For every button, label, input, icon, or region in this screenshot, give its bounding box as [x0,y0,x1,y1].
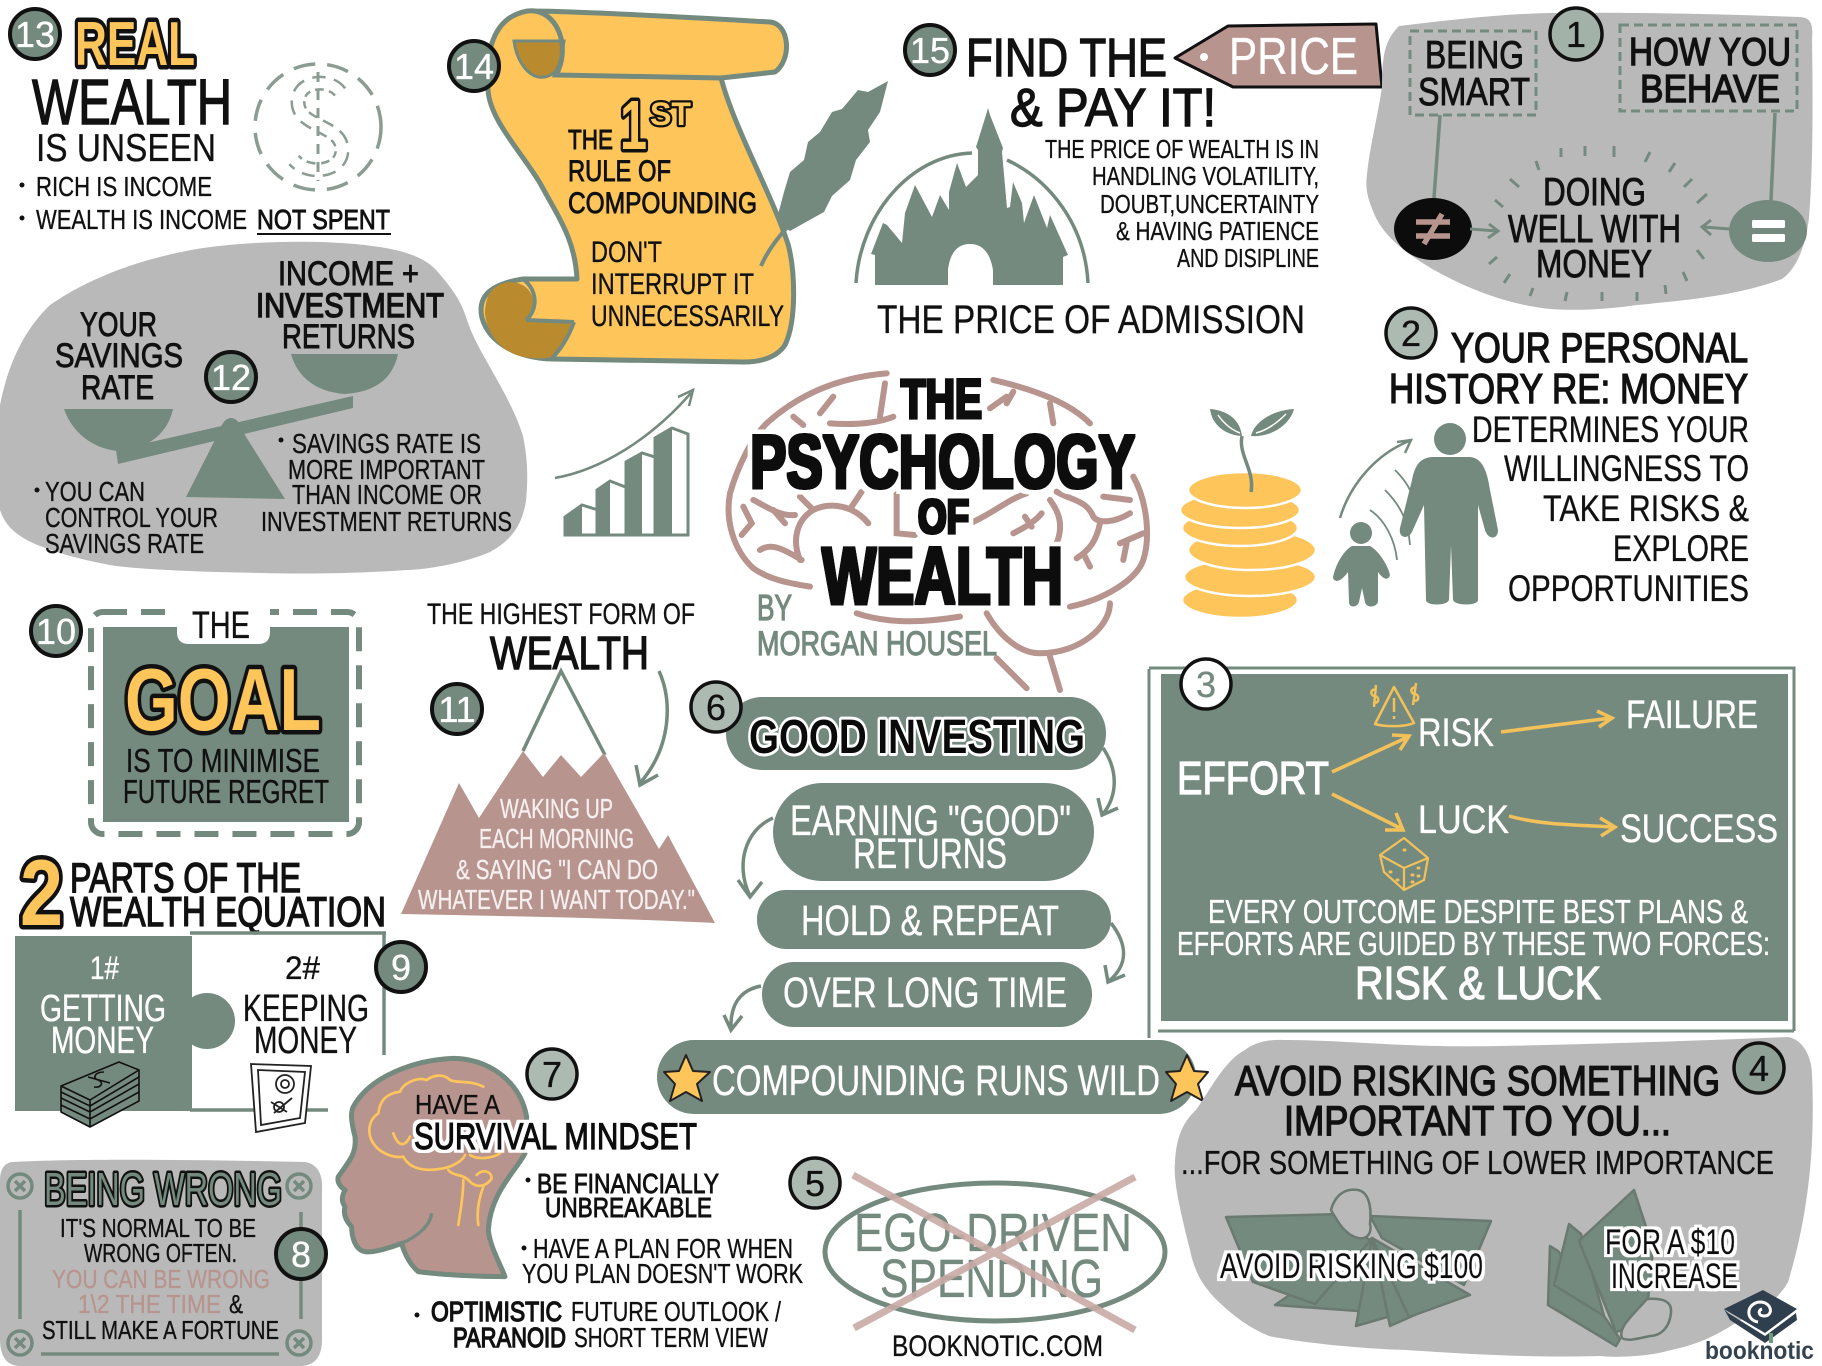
bullet: financially unbreakable [526,1168,719,1223]
text: savings rate is more important [261,428,512,537]
heading [1389,324,1748,412]
heading: the 1st rule of compounding: 1 [620,86,647,164]
box: how you behave: BEHAVE [1640,68,1780,111]
tab: the: THE [192,605,250,647]
text: determines willingness: EXPLORE [1613,528,1749,569]
badge 8 [276,1229,326,1279]
icon: growth bar chart [555,390,693,535]
arrows: risk and luck paths [1332,711,1615,836]
heading: have a survival mindset [414,1089,697,1157]
text: ego-driven spending: SPENDING [880,1249,1103,1309]
heading: real wealth is unseen: IS UNSEEN [36,127,216,170]
decorative frame with clock icons [8,1174,311,1355]
text: every outcome: RISK & LUCK [1355,957,1601,1009]
text: price of wealth: & HAVING PATIENCE [1116,216,1319,246]
pill: earning good returns [773,783,1094,881]
badge 15: 15 [910,30,950,71]
text: you can control your savings rate: YOU CAN [45,476,145,507]
labels: effort risk luck failure success: LUCK [1418,798,1509,842]
scale labels: SAVINGS [55,337,183,375]
text: waking up [418,793,695,915]
heading: find the & pay it: & PAY IT! [1010,78,1216,138]
text: you can control your savings rate: CONTROL YOUR [45,502,218,533]
heading: THE HIGHEST FORM OF [427,598,695,631]
icon: left star [664,1055,710,1101]
panel 2: personal history re money [1180,308,1749,618]
text: don't interrupt it unnecessarily [591,236,784,333]
panel 12: savings rate scale [0,242,527,574]
title: the psychology of wealth: WEALTH [822,531,1063,622]
heading: real wealth is unseen: WEALTH [32,66,232,138]
icon: brain [729,373,1147,690]
panel 6: good investing flow [657,682,1208,1114]
bullet: optimistic and paranoid: SHORT TERM VIEW [574,1322,768,1353]
pill: over long time [762,962,1092,1027]
text: doing well with money [1508,171,1681,286]
connector lines [1434,113,1775,200]
arrows between pills [724,748,1125,1030]
badge 3: 3 [1196,664,1216,705]
heading: 2 [20,840,63,945]
labels: effort risk luck failure success: SUCCESS [1620,807,1778,851]
text: every outcome [1177,893,1770,1009]
heading: HISTORY RE: MONEY [1389,365,1748,412]
badge 5: 5 [805,1163,825,1204]
bullet: optimistic and paranoid: PARANOID [453,1322,566,1353]
text: normal to be wrong: YOU CAN BE WRONG [52,1264,270,1294]
text: don't interrupt it unnecessarily: INTERRUPT IT [591,268,754,301]
bullet list: rich vs wealth: RICH IS INCOME [36,171,212,202]
label: avoid risking $100: AVOID RISKING $100 [1220,1247,1483,1286]
bullet list: rich vs wealth: NOT SPENT [257,204,390,235]
heading: WEALTH EQUATION [70,888,386,935]
text: price of wealth: DOUBT,UNCERTAINTY [1100,189,1319,219]
heading: being wrong: BEING WRONG [44,1163,282,1215]
text: getting money: 1# [90,950,119,986]
text: you can control your savings rate: SAVINGS RATE [45,528,204,559]
arrow: to mountain [636,671,667,785]
icon: money stack [61,1062,139,1127]
pill: over long time: OVER LONG TIME [783,969,1067,1017]
panel background [0,1160,322,1366]
bullet: optimistic and paranoid: FUTURE OUTLOOK / [571,1296,781,1327]
text: savings rate is more important: SAVINGS RATE IS [292,428,481,459]
text: savings rate is more important: MORE IMPORTANT [288,454,485,485]
panel 14: first rule of compounding scroll [449,11,888,362]
badge 10 [31,606,81,656]
labels: effort risk luck failure success [1177,693,1778,851]
scale labels: YOUR [80,306,157,344]
text: price of wealth: HANDLING VOLATILITY, [1092,161,1319,191]
icon: castle [856,108,1088,285]
badge 12: 12 [211,357,251,398]
badge 5 [790,1158,840,1208]
labels: effort risk luck failure success: EFFORT [1177,752,1329,804]
badge 13: 13 [15,14,55,55]
panel 5: ego driven spending [790,1158,1165,1363]
text: savings rate is more important: INVESTMENT RETURNS [261,506,512,537]
text: determines willingness: WILLINGNESS TO [1504,448,1749,489]
price tag: PRICE [1229,28,1358,86]
scale labels: INCOME + [278,255,419,293]
badge 4: 4 [1749,1048,1769,1089]
pill: earning good returns: EARNING "GOOD" [790,797,1071,845]
badge 4 [1734,1043,1784,1093]
badge 14 [449,41,499,91]
badge 6 [691,682,741,732]
labels: effort risk luck failure success: FAILURE [1626,693,1758,737]
text: doing well with money: DOING [1543,171,1646,214]
icon: warning triangle [1371,683,1418,726]
text: price of wealth: AND DISIPLINE [1177,243,1319,273]
text: normal to be wrong: IT'S NORMAL TO BE [60,1213,256,1243]
text: normal to be wrong: STILL MAKE A FORTUNE [42,1315,279,1345]
badge 3 [1181,659,1231,709]
panel 10: the goal [31,605,359,834]
scale labels: INVESTMENT [256,287,444,325]
badge 13 [10,9,60,59]
text: minimise future regret [123,742,329,810]
green box [1161,674,1788,1021]
text: determines willingness: DETERMINES YOUR [1472,409,1749,450]
panel 11: highest form of wealth [401,598,715,923]
text: normal to be wrong: & [229,1289,243,1319]
badge 1: 1 [1566,14,1586,55]
text: waking up: & SAYING "I CAN DO [456,854,658,885]
badge 10: 10 [36,611,76,652]
label: for a $10 increase: INCREASE [1611,1257,1738,1296]
scale labels: RATE [81,369,154,407]
badge 9: 9 [391,947,411,988]
heading: AVOID RISKING SOMETHING [1235,1057,1720,1104]
badge 11: 11 [438,689,476,730]
badge 14: 14 [454,46,494,87]
bullet: financially unbreakable: BE FINANCIALLY [537,1168,719,1199]
bullet: have a plan [522,1233,803,1289]
title: the psychology of wealth: PSYCHOLOGY [750,420,1135,505]
bullet: have a plan: YOU PLAN DOESN'T WORK [522,1258,803,1289]
central title with brain [729,367,1147,690]
badge 2: 2 [1401,313,1421,354]
icon: fanned bills small [1548,1190,1671,1346]
heading: IMPORTANT TO YOU... [1284,1097,1671,1144]
icon: head with brain [338,1058,527,1277]
heading: the 1st rule of compounding: RULE OF [568,155,671,188]
panel 15: find the price and pay it [856,24,1382,342]
heading: real wealth is unseen [32,10,232,170]
icon: right star [1166,1055,1208,1101]
puzzle piece [15,936,235,1111]
cross out [853,1175,1135,1330]
heading: the 1st rule of compounding [568,86,757,220]
scale labels [55,255,444,407]
pill: earning good returns: RETURNS [853,830,1007,878]
heading [1181,1057,1774,1181]
panel background [1366,13,1813,310]
text: normal to be wrong: WRONG OFTEN. [84,1238,237,1268]
author: by morgan housel: MORGAN HOUSEL [757,625,997,663]
text: savings rate is more important: THAN INCOME OR [292,479,482,510]
text: ego-driven spending [854,1203,1132,1309]
panel 13: real wealth [10,9,391,235]
icon: fan of bills [1226,1190,1491,1326]
pill: hold and repeat [757,890,1111,949]
badge 11 [432,684,482,734]
panel 1: being smart vs how you behave [1366,8,1813,310]
icon: equals [1729,200,1807,262]
bullet: have a plan: HAVE A PLAN FOR WHEN [533,1233,793,1264]
panel background [1175,1037,1813,1357]
panel background [0,242,527,574]
text: waking up: WHATEVER I WANT TODAY." [418,884,695,915]
badge 8: 8 [291,1234,311,1275]
puzzle frame [190,933,386,1110]
text: keeping money: KEEPING [243,988,369,1030]
icon: balance scale [64,354,398,499]
label: for a $10 increase: FOR A $10 [1605,1223,1735,1262]
box: being smart: BEING [1425,34,1524,77]
pill: compounding runs wild: COMPOUNDING RUNS WILD [712,1057,1160,1105]
title: the psychology of wealth [750,367,1135,622]
pill: hold and repeat: HOLD & REPEAT [801,897,1059,945]
arrow: equals to doing well [1702,220,1730,235]
website: BOOKNOTIC.COM [892,1330,1103,1363]
text: normal to be wrong: 1\2 THE TIME [78,1289,221,1319]
heading: the 1st rule of compounding: ST [650,96,691,132]
panel 4: avoid risking something important [1175,1037,1813,1357]
heading: find the & pay it [966,28,1216,138]
price tag [1175,24,1382,87]
heading: find the & pay it: FIND THE [966,28,1167,88]
text: you can control your savings rate [34,476,218,559]
box: how you behave [1620,25,1797,111]
text: determines willingness: OPPORTUNITIES [1508,568,1749,609]
box: being smart: SMART [1418,71,1530,114]
labels: effort risk luck failure success: RISK [1418,711,1494,755]
bullet list: rich vs wealth: WEALTH IS INCOME [36,204,247,235]
goal box [103,627,349,822]
badge 9 [376,942,426,992]
icon: dice [1380,838,1428,890]
text: don't interrupt it unnecessarily: DON'T [591,236,662,269]
heading: the 1st rule of compounding: COMPOUNDING [568,187,757,220]
text: minimise future regret: FUTURE REGRET [123,773,329,810]
text: don't interrupt it unnecessarily: UNNECESSARILY [591,300,784,333]
author: by morgan housel [757,587,997,663]
text: price of wealth [1045,134,1319,273]
text: keeping money [243,950,369,1062]
badge 15 [905,25,955,75]
text: waking up: EACH MORNING [479,823,634,854]
heading [20,840,386,945]
heading: have a survival mindset: SURVIVAL MINDSET [414,1116,697,1157]
text: price of wealth: THE PRICE OF WEALTH IS IN [1045,134,1319,164]
icon: not equal [1394,198,1472,260]
label: for a $10 increase [1605,1223,1738,1296]
pill: compounding runs wild [657,1040,1196,1114]
panel 8: being wrong [0,1160,326,1366]
wordmark: booknotic [1705,1337,1814,1365]
bullet: optimistic and paranoid: OPTIMISTIC [431,1296,562,1327]
text: minimise future regret: IS TO MINIMISE [126,742,320,779]
icon: mountain [401,671,715,923]
heading: have a survival mindset: HAVE A [415,1089,500,1120]
heading: the 1st rule of compounding: THE [568,124,613,155]
heading [427,598,695,679]
text: keeping money: 2# [285,950,320,986]
panel 7: survival mindset [338,1049,803,1353]
dashed frame [91,612,359,834]
box: how you behave: HOW YOU [1629,31,1791,74]
heading: PARTS OF THE [70,854,301,901]
scale labels: RETURNS [282,318,415,356]
badge 6: 6 [706,687,726,728]
heading: real wealth is unseen: REAL [75,10,195,79]
text: determines willingness [1472,409,1749,609]
title: the psychology of wealth: OF [918,491,969,544]
frame [1149,668,1794,1038]
oval [825,1183,1165,1321]
icon: safe [251,1064,311,1132]
badge 2 [1386,308,1436,358]
pill: good investing: GOOD INVESTING [749,711,1085,764]
booknotic logo [1705,1290,1814,1365]
panel 9: two parts of the wealth equation [15,840,426,1132]
text: ego-driven spending: EGO-DRIVEN [854,1203,1132,1263]
text: waking up: WAKING UP [500,793,613,824]
text: getting money: MONEY [51,1020,154,1062]
icon: quill [761,81,888,266]
icon: parent and child [1333,423,1498,606]
quill stem over scroll [761,212,800,266]
badge 1 [1550,8,1602,60]
author: by morgan housel: BY [757,587,792,628]
bullet: financially unbreakable: UNBREAKABLE [545,1192,712,1223]
rays around doing well [1489,146,1707,301]
icon: sprout on coins [1180,409,1316,618]
panel 3: risk and luck [1149,659,1794,1038]
heading: YOUR PERSONAL [1451,324,1748,371]
icon: scroll [481,11,794,362]
text: normal to be wrong [42,1213,279,1345]
heading: WEALTH [490,627,649,679]
badge 12 [206,352,256,402]
caption: the price of admission: THE PRICE OF ADMISSION [877,298,1305,342]
pill: good investing [726,697,1106,770]
text: keeping money: MONEY [254,1020,357,1062]
badge 7: 7 [542,1054,562,1095]
text: getting money: GETTING [40,988,166,1030]
arrow: not equal to doing well [1470,224,1498,238]
box: being smart [1410,31,1536,115]
bullet: optimistic and paranoid [414,1296,781,1353]
title: the psychology of wealth: THE [901,367,982,430]
text: getting money [40,950,166,1062]
badge 7 [527,1049,577,1099]
bullet list: rich vs wealth [20,171,391,235]
icon: dashed dollar coin [255,64,381,190]
icon: book cube [1724,1290,1797,1343]
text: determines willingness: TAKE RISKS & [1543,488,1749,529]
text: doing well with money: WELL WITH [1508,208,1681,251]
text: doing well with money: MONEY [1536,243,1652,286]
heading: goal: GOAL [125,650,321,749]
